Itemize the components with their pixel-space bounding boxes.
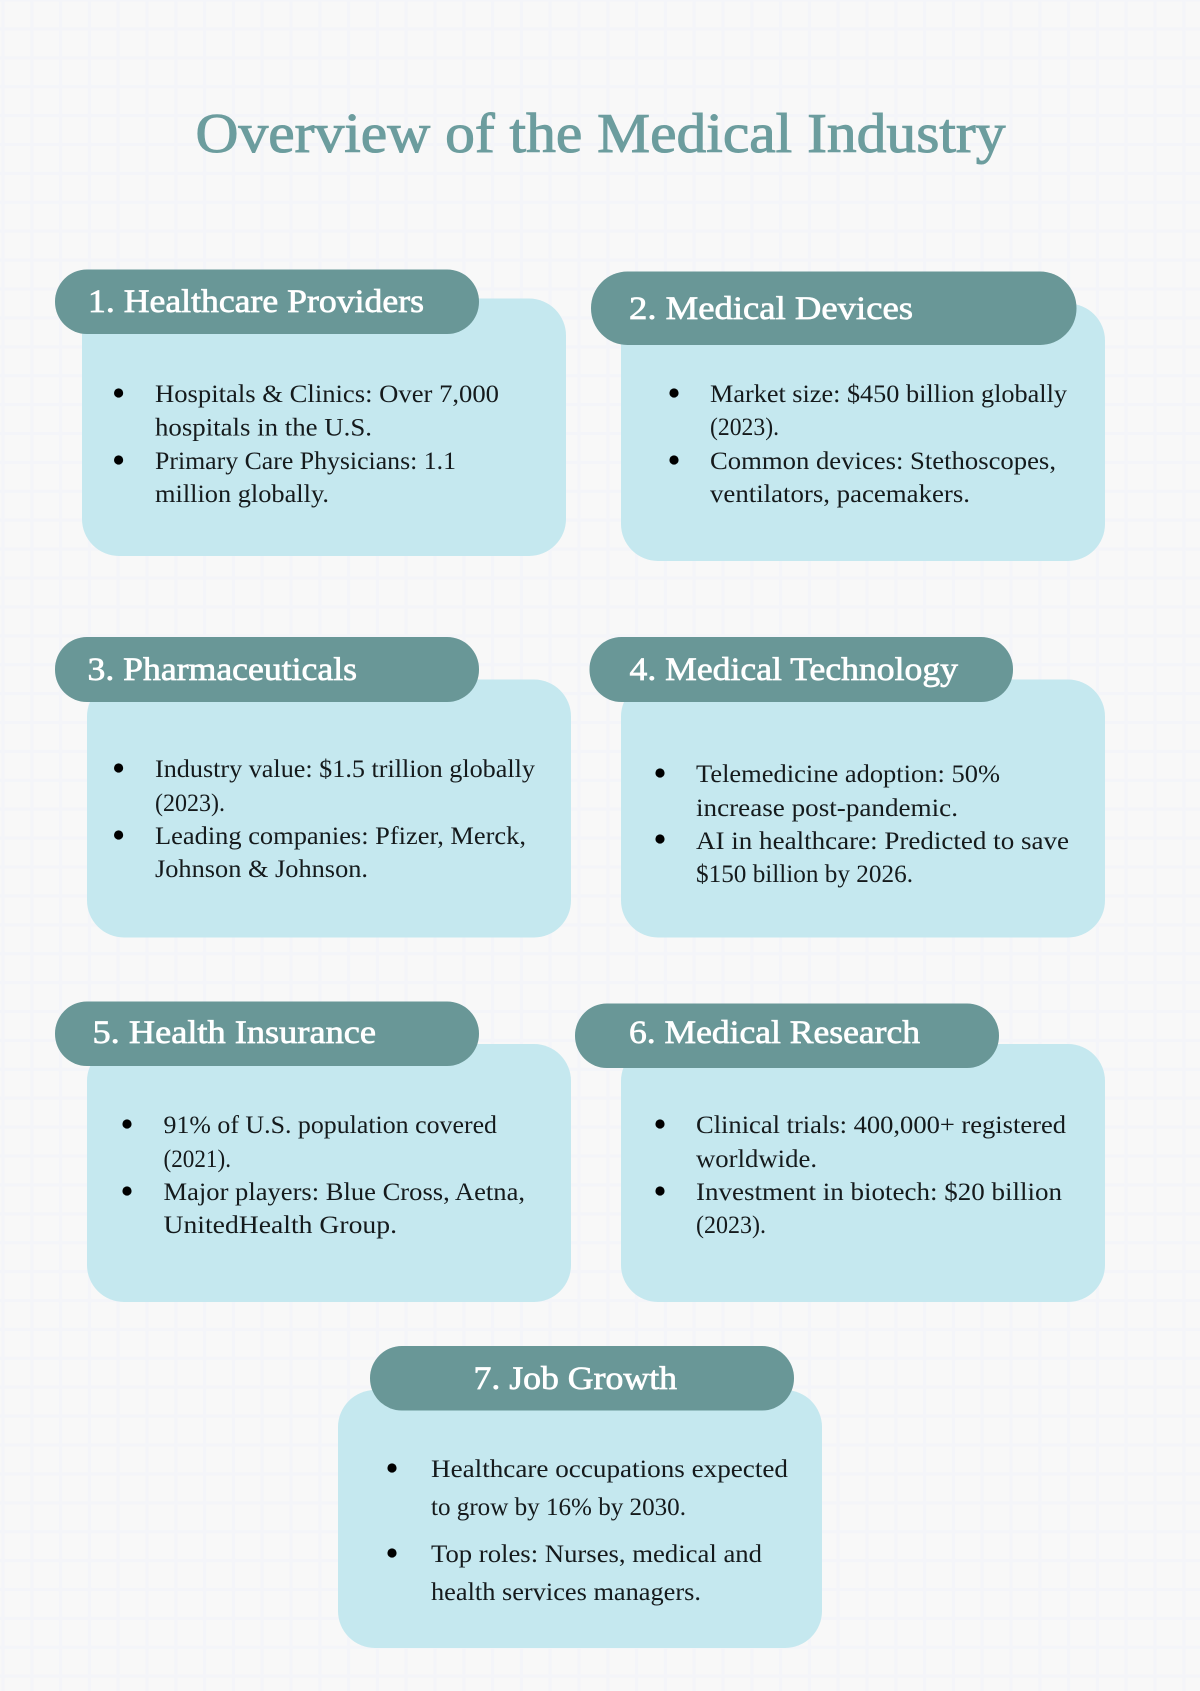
list: pharmaceuticals: (2023). bbox=[155, 788, 225, 817]
list: healthcare providers: million globally. bbox=[155, 479, 329, 508]
title: Overview of the Medical Industry bbox=[196, 103, 1006, 165]
list: medical technology: Telemedicine adoption: 50% bbox=[696, 759, 1000, 788]
list: medical research: Clinical trials: 400,000+ registered bbox=[696, 1110, 1066, 1139]
list: health insurance: Major players: Blue Cross, Aetna, bbox=[164, 1177, 525, 1206]
list: job growth: Healthcare occupations expected bbox=[431, 1454, 788, 1483]
list: medical devices: (2023). bbox=[710, 412, 779, 441]
heading: pharmaceuticals: 3. Pharmaceuticals bbox=[88, 652, 357, 688]
list: healthcare providers: Hospitals & Clinics: Over 7,000 bbox=[155, 379, 499, 408]
heading: job growth: 7. Job Growth bbox=[474, 1361, 678, 1397]
heading: medical devices: 2. Medical Devices bbox=[629, 291, 913, 327]
list: health insurance: (2021). bbox=[164, 1144, 231, 1173]
panel: medical devices bbox=[591, 272, 1105, 561]
panel: medical research bbox=[575, 1004, 1105, 1302]
list: medical research: Investment in biotech: $20 billion bbox=[696, 1177, 1062, 1206]
list: medical devices: Common devices: Stethoscopes, bbox=[710, 446, 1056, 475]
panel: health insurance bbox=[55, 1002, 571, 1302]
list: job growth bbox=[387, 1454, 788, 1606]
list: healthcare providers bbox=[114, 379, 499, 508]
list: medical technology: $150 billion by 2026. bbox=[696, 859, 913, 888]
list: medical technology: AI in healthcare: Predicted to save bbox=[696, 826, 1069, 855]
list: healthcare providers: Primary Care Physicians: 1.1 bbox=[155, 446, 456, 475]
list: pharmaceuticals: Leading companies: Pfizer, Merck, bbox=[155, 821, 526, 850]
heading: medical research: 6. Medical Research bbox=[629, 1015, 921, 1051]
heading: healthcare providers: 1. Healthcare Providers bbox=[88, 284, 424, 320]
list: job growth: health services managers. bbox=[431, 1577, 701, 1606]
list: job growth: to grow by 16% by 2030. bbox=[431, 1492, 686, 1521]
panel: healthcare providers bbox=[55, 270, 566, 556]
list: health insurance: UnitedHealth Group. bbox=[164, 1210, 397, 1239]
list: health insurance: 91% of U.S. population covered bbox=[164, 1110, 497, 1139]
list: medical devices: Market size: $450 billion globally bbox=[710, 379, 1067, 408]
list: medical research: worldwide. bbox=[696, 1144, 817, 1173]
list: job growth: Top roles: Nurses, medical and bbox=[431, 1539, 762, 1568]
list: pharmaceuticals: Industry value: $1.5 trillion globally bbox=[155, 754, 535, 783]
list: health insurance bbox=[122, 1110, 525, 1239]
list: healthcare providers: hospitals in the U.S. bbox=[155, 412, 372, 442]
panel: job growth bbox=[338, 1346, 822, 1648]
list: medical devices: ventilators, pacemakers. bbox=[710, 479, 970, 508]
list: pharmaceuticals bbox=[114, 754, 535, 883]
panel: medical technology bbox=[590, 637, 1105, 938]
list: medical research: (2023). bbox=[696, 1210, 766, 1239]
panel: pharmaceuticals bbox=[55, 637, 571, 938]
list: medical technology bbox=[655, 759, 1069, 888]
heading: health insurance: 5. Health Insurance bbox=[92, 1015, 376, 1051]
list: pharmaceuticals: Johnson & Johnson. bbox=[155, 854, 368, 883]
list: medical devices bbox=[669, 379, 1067, 508]
heading: medical technology: 4. Medical Technology bbox=[630, 652, 959, 688]
list: medical research bbox=[655, 1110, 1066, 1239]
list: medical technology: increase post-pandemic. bbox=[696, 793, 958, 822]
